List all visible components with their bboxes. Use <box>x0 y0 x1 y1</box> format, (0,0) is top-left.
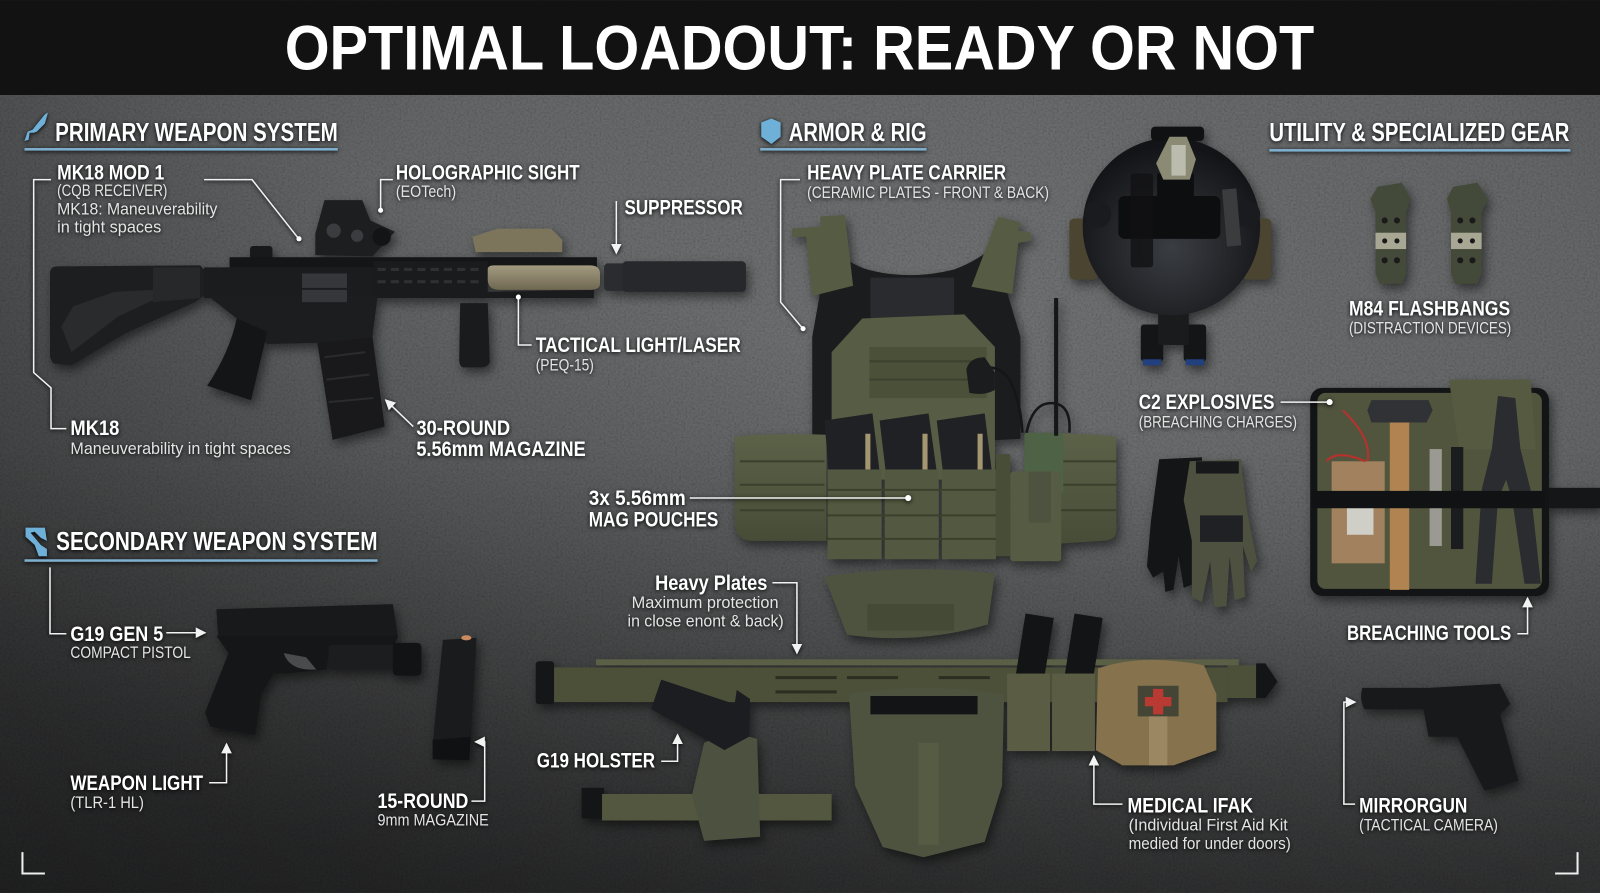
panel: battle belt <box>536 614 1291 857</box>
callout: C2 explosives: C2 EXPLOSIVES <box>1139 390 1274 414</box>
rifle illustration <box>50 200 746 440</box>
callout: suppressor <box>616 195 743 253</box>
heading: secondary weapon system <box>24 528 378 562</box>
callout: holographic sight: HOLOGRAPHIC SIGHT <box>396 161 580 185</box>
callout: tactical light/laser <box>516 294 741 374</box>
callout: heavy plate carrier: (CERAMIC PLATES - FRONT & BACK) <box>807 184 1049 202</box>
callout: medical IFAK: medied for under doors) <box>1129 835 1291 853</box>
callout: mirrorgun: (TACTICAL CAMERA) <box>1359 817 1498 835</box>
callout: holographic sight: (EOTech) <box>396 183 456 201</box>
callout: MK18: Maneuverability in tight spaces <box>70 440 291 458</box>
callout: medical IFAK <box>1094 756 1291 853</box>
callout: G19 holster: G19 HOLSTER <box>537 748 656 772</box>
callout: tactical light/laser: (PEQ-15) <box>536 356 594 374</box>
callout: 30-round magazine: 30-ROUND <box>416 416 510 440</box>
callout: mag pouches <box>589 486 911 532</box>
callout: 15-round magazine <box>378 742 489 830</box>
callout: heavy plate carrier: HEAVY PLATE CARRIER <box>807 161 1007 185</box>
belt illustration <box>536 614 1278 857</box>
callout: tactical light/laser: TACTICAL LIGHT/LASER <box>536 333 741 357</box>
callout: heavy plates: in close enont & back) <box>628 613 784 631</box>
callout: breaching tools <box>1347 598 1528 645</box>
callout: 15-round magazine: 15-ROUND <box>378 789 468 813</box>
spare magazine illustration <box>433 635 477 760</box>
panel: utility and specialized gear <box>1069 119 1600 835</box>
panel: armor and rig <box>589 118 1116 653</box>
helmet illustration <box>1069 127 1271 365</box>
panel: primary weapon system <box>24 112 746 461</box>
callout: breaching tools: BREACHING TOOLS <box>1347 621 1511 645</box>
callout: weapon light <box>70 744 227 812</box>
callout: G19 gen 5 <box>50 567 205 662</box>
callout: suppressor: SUPPRESSOR <box>624 195 743 219</box>
callout: MK18 MOD 1: MK18 MOD 1 <box>57 161 164 185</box>
callout: G19 gen 5: G19 GEN 5 <box>70 622 163 646</box>
callout: mirrorgun: MIRRORGUN <box>1359 793 1467 817</box>
callout: mag pouches: MAG POUCHES <box>589 508 718 532</box>
flashbang illustrations <box>1370 183 1488 284</box>
callout: heavy plates <box>628 571 797 653</box>
callout: weapon light: (TLR-1 HL) <box>70 794 144 812</box>
mirrorgun illustration <box>1361 684 1518 791</box>
callout: MK18 MOD 1: (CQB RECEIVER) <box>57 182 167 200</box>
callout: heavy plates: Heavy Plates <box>655 571 767 595</box>
callout: MK18: MK18 <box>70 416 119 440</box>
pistol illustration <box>205 604 421 735</box>
corner marks <box>22 852 1578 874</box>
callout: M84 flashbangs: (DISTRACTION DEVICES) <box>1349 320 1511 338</box>
callout: mag pouches: 3x 5.56mm <box>589 486 686 510</box>
callout: heavy plates: Maximum protection <box>632 594 779 612</box>
callout: 15-round magazine: 9mm MAGAZINE <box>378 812 489 830</box>
callout: M84 flashbangs: M84 FLASHBANGS <box>1349 296 1510 320</box>
callout: G19 gen 5: COMPACT PISTOL <box>70 644 191 662</box>
callout: holographic sight <box>378 161 580 213</box>
callout: mirrorgun <box>1344 702 1498 835</box>
callout: 30-round magazine <box>386 400 586 461</box>
callout: MK18 <box>70 416 291 458</box>
heading: primary weapon system: PRIMARY WEAPON SYSTEM <box>55 119 338 147</box>
callout: medical IFAK: (Individual First Aid Kit <box>1129 817 1288 835</box>
callout: C2 explosives: (BREACHING CHARGES) <box>1139 414 1297 432</box>
callout: MK18 MOD 1 <box>34 161 302 429</box>
title banner: OPTIMAL LOADOUT: READY OR NOT <box>285 13 1314 83</box>
callout: medical IFAK: MEDICAL IFAK <box>1128 793 1253 817</box>
heading: armor and rig <box>760 118 927 151</box>
plate carrier illustration <box>735 215 1116 638</box>
callout: G19 holster <box>537 735 678 772</box>
title banner <box>0 0 1600 95</box>
callout: 30-round magazine: 5.56mm MAGAZINE <box>416 437 586 461</box>
callout: MK18 MOD 1: in tight spaces <box>57 219 161 237</box>
panel: secondary weapon system <box>24 528 489 830</box>
gloves illustration <box>1147 457 1257 607</box>
callout: weapon light: WEAPON LIGHT <box>70 771 203 795</box>
callout: heavy plate carrier <box>781 161 1049 331</box>
callout: MK18 MOD 1: MK18: Maneuverability <box>57 200 218 218</box>
heading: secondary weapon system: SECONDARY WEAPON SYSTEM <box>56 528 378 556</box>
tool roll illustration <box>1310 380 1600 596</box>
heading: primary weapon system <box>24 112 338 151</box>
callout: M84 flashbangs <box>1349 296 1511 338</box>
callout: C2 explosives <box>1139 390 1333 432</box>
heading: armor and rig: ARMOR & RIG <box>789 119 927 147</box>
